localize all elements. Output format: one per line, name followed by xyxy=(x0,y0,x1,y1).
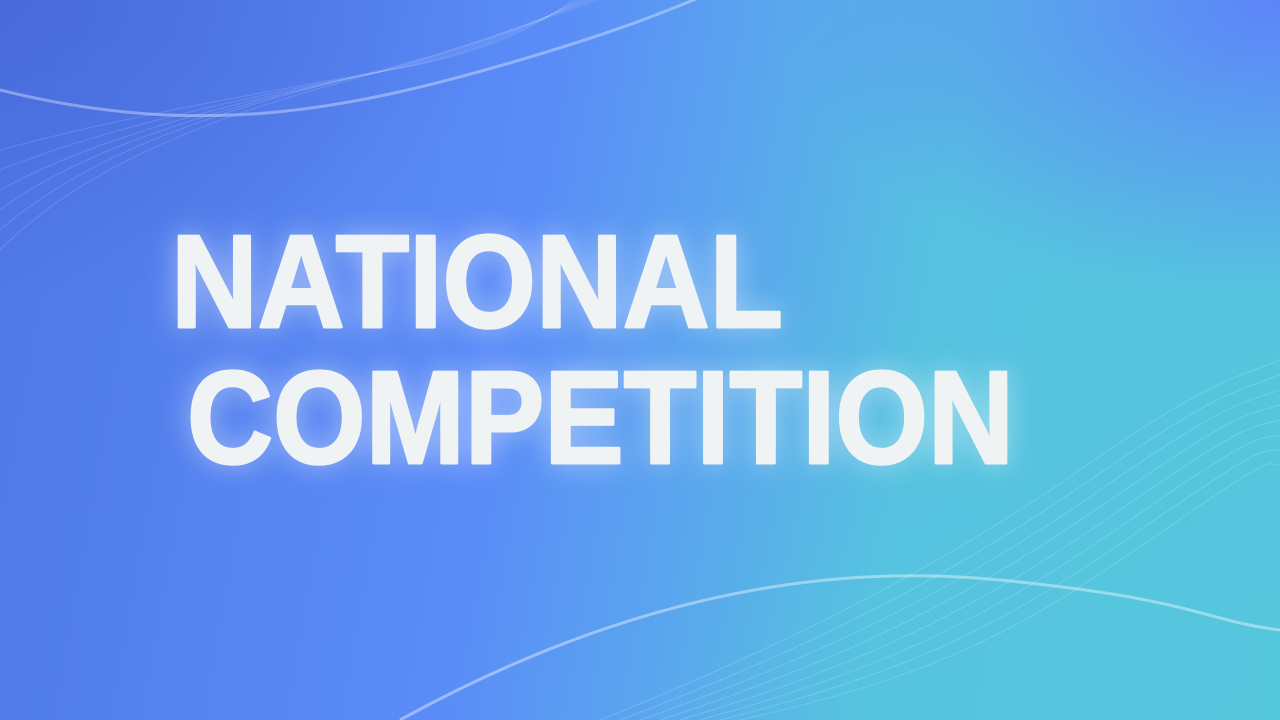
title: COMPETITION xyxy=(187,344,1014,491)
title: NATIONAL xyxy=(171,208,783,355)
